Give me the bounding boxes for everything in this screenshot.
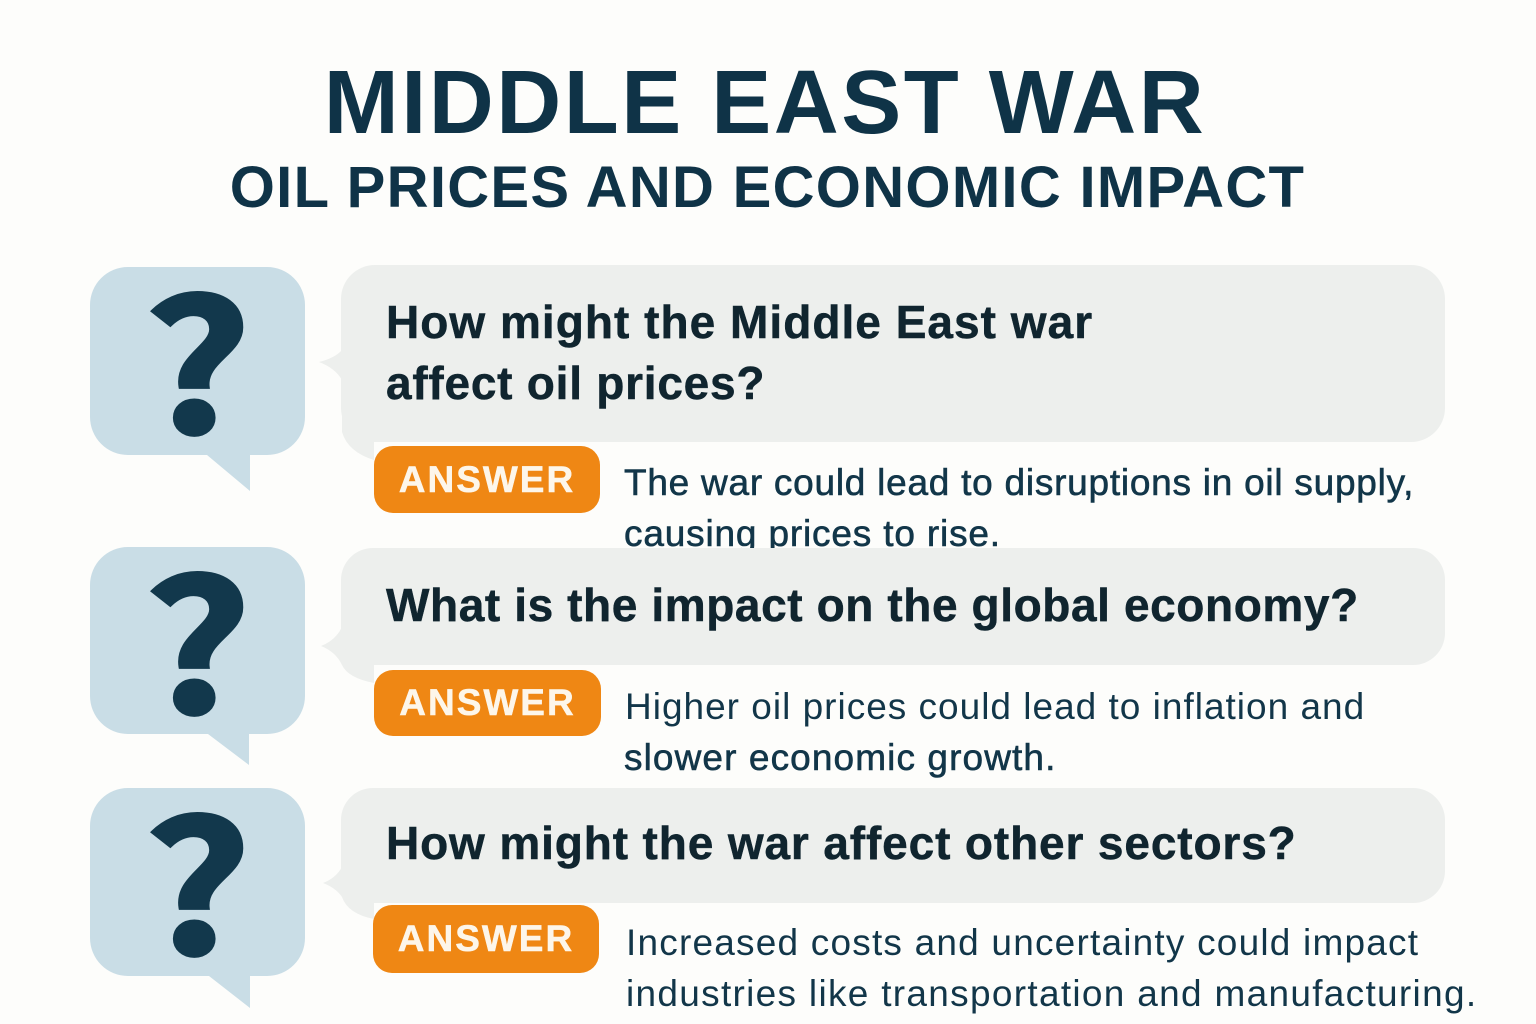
answer text 2: Higher oil prices could lead to inflation and bbox=[625, 686, 1365, 727]
answer text 3 bbox=[626, 922, 1477, 1014]
title: MIDDLE EAST WAR bbox=[324, 53, 1206, 153]
answer text 3: industries like transportation and manufacturing. bbox=[626, 973, 1477, 1014]
question card 3 pointer bbox=[324, 869, 374, 919]
answer badge 3 bbox=[373, 905, 599, 973]
answer badge 2: ANSWER bbox=[399, 682, 576, 723]
answer text 1 bbox=[624, 462, 1414, 554]
answer badge 1 bbox=[374, 446, 600, 513]
question card 1 bbox=[341, 265, 1445, 442]
question text 3: How might the war affect other sectors? bbox=[386, 817, 1297, 869]
answer text 2: slower economic growth. bbox=[624, 737, 1056, 778]
icon: question bubble 3 bbox=[90, 786, 305, 1008]
icon: question bubble 2 bbox=[90, 546, 305, 765]
subtitle: OIL PRICES AND ECONOMIC IMPACT bbox=[230, 155, 1305, 220]
panel: question 2 bbox=[90, 546, 1445, 778]
question text 1: How might the Middle East war bbox=[386, 296, 1093, 348]
question card 2 pointer bbox=[322, 630, 374, 683]
icon: question bubble 1: ? bbox=[144, 224, 251, 485]
question text 1: affect oil prices? bbox=[386, 357, 765, 409]
answer badge 3: ANSWER bbox=[398, 918, 574, 959]
icon: question bubble 1 bbox=[90, 224, 305, 491]
answer badge 2 bbox=[374, 670, 601, 736]
question text 2: What is the impact on the global economy? bbox=[386, 579, 1359, 631]
question card 3 bbox=[341, 788, 1445, 903]
question card 2 bbox=[341, 548, 1445, 665]
answer text 1: causing prices to rise. bbox=[624, 513, 1001, 554]
answer text 1: The war could lead to disruptions in oil supply, bbox=[624, 462, 1414, 503]
panel: question 3 bbox=[90, 786, 1477, 1014]
answer badge 1: ANSWER bbox=[399, 459, 575, 500]
answer text 3: Increased costs and uncertainty could impact bbox=[626, 922, 1419, 963]
answer text 2 bbox=[624, 686, 1365, 778]
question text 1 bbox=[386, 296, 1093, 409]
panel: question 1 bbox=[90, 224, 1445, 554]
question card 1 pointer bbox=[320, 352, 374, 460]
